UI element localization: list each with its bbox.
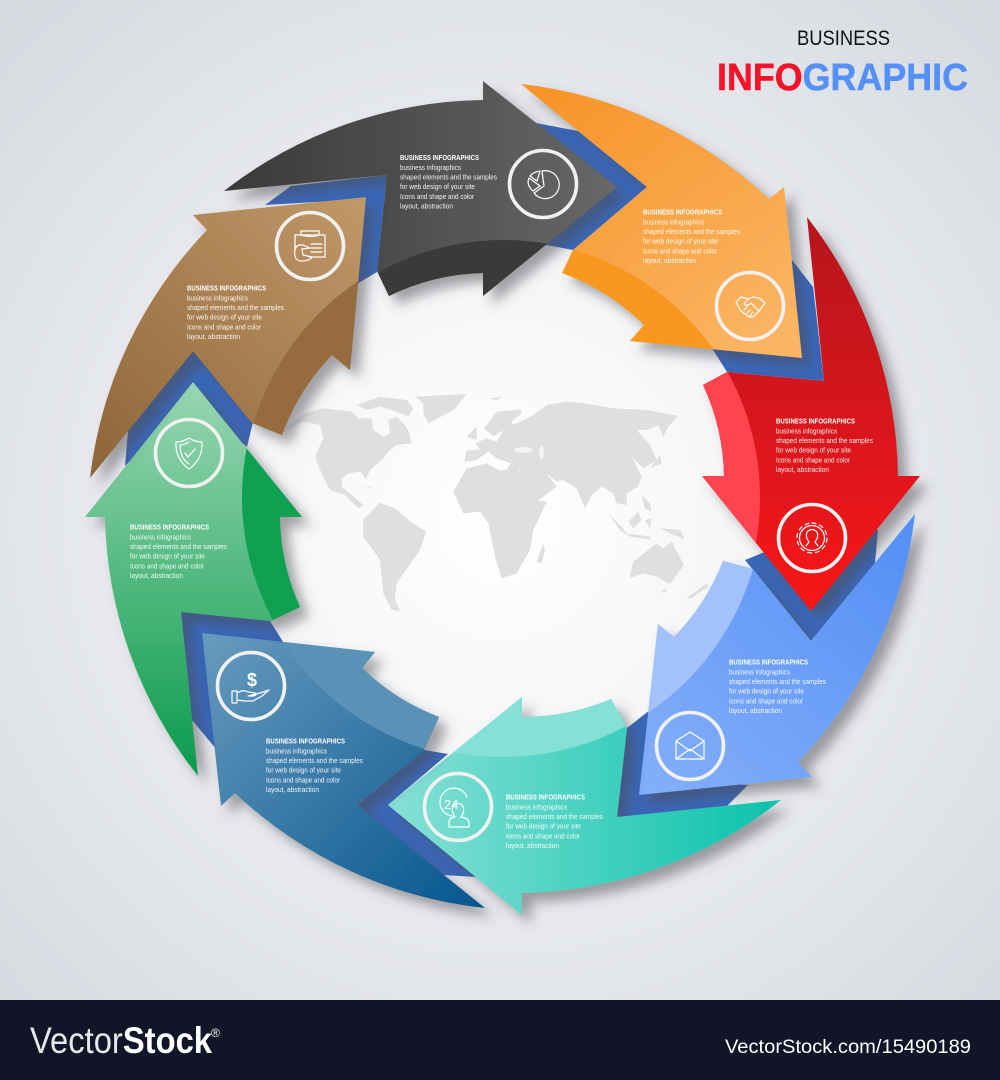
text: black panel: layout, abstraction <box>400 202 453 210</box>
icon: gear with person <box>778 504 846 572</box>
text: black panel: BUSINESS INFOGRAPHICS <box>400 153 479 162</box>
text: teal panel: for web design of your site <box>506 822 581 830</box>
text: brown panel: shaped elements and the samples <box>187 303 284 312</box>
text: brown panel: Icons and shape and color <box>187 322 261 332</box>
text: teal panel <box>506 792 603 850</box>
title: BUSINESS <box>797 27 890 50</box>
text: light blue panel: layout, abstraction <box>729 706 782 715</box>
footer url: VectorStock.com/15490189 <box>725 1037 971 1058</box>
panel: green arrow <box>85 382 314 784</box>
text: orange panel: business infographics <box>643 218 704 226</box>
text: brown panel: for web design of your site <box>187 312 262 322</box>
text: orange panel: shaped elements and the samples <box>643 227 740 236</box>
panel: teal arrow <box>388 697 790 926</box>
panel: light blue arrow <box>639 514 929 809</box>
text: red panel <box>776 416 873 474</box>
text: light blue panel: Icons and shape and color <box>729 696 803 706</box>
text: brown panel <box>187 284 284 341</box>
text: light blue panel: BUSINESS INFOGRAPHICS <box>729 658 808 666</box>
text: brown panel: business infographics <box>187 294 248 302</box>
icon: handshake <box>716 272 784 340</box>
text: dark blue panel: BUSINESS INFOGRAPHICS <box>266 736 345 746</box>
text: green panel: shaped elements and the samples <box>130 542 227 551</box>
text: red panel: BUSINESS INFOGRAPHICS <box>776 416 855 426</box>
text: dark blue panel: shaped elements and the samples <box>266 756 363 765</box>
title: INFOGRAPHIC <box>717 57 968 99</box>
text: green panel <box>130 522 227 580</box>
footer logo: VectorStock <box>30 1020 212 1061</box>
text: brown panel: BUSINESS INFOGRAPHICS <box>187 284 266 292</box>
arrow: brown <box>90 197 366 478</box>
panel: orange arrow <box>521 84 816 372</box>
icon: 24 hour support <box>424 774 492 840</box>
text: orange panel: for web design of your site <box>643 236 718 246</box>
text: red panel: for web design of your site <box>776 446 851 454</box>
footer bar <box>0 1000 1000 1080</box>
text: brown panel: layout, abstraction <box>187 332 240 341</box>
text: orange panel: BUSINESS INFOGRAPHICS <box>643 208 722 216</box>
text: green panel: Icons and shape and color <box>130 562 204 570</box>
icon: envelope <box>656 712 724 780</box>
panel: brown arrow <box>90 197 380 486</box>
arrow: red <box>702 217 920 611</box>
connector: blue folds behind arrow heads <box>125 120 878 877</box>
text: dark blue panel: for web design of your site <box>266 766 341 774</box>
text: green panel: BUSINESS INFOGRAPHICS <box>130 522 209 532</box>
text: red panel: business infographics <box>776 426 837 436</box>
text: light blue panel: for web design of your site <box>729 686 804 696</box>
text: dark blue panel: Icons and shape and color <box>266 776 340 784</box>
text: dark blue panel <box>266 736 363 794</box>
arrow: black <box>224 81 617 296</box>
text: teal panel: business infographics <box>506 802 567 812</box>
icon: dollar in hand <box>218 652 284 720</box>
text: teal panel: BUSINESS INFOGRAPHICS <box>506 792 585 802</box>
text: orange panel <box>643 208 740 265</box>
icon: dollar in hand: $ <box>247 670 257 690</box>
text: black panel: for web design of your site <box>400 182 475 191</box>
text: teal panel: shaped elements and the samples <box>506 812 603 821</box>
text: light blue panel: shaped elements and the samples <box>729 677 826 686</box>
text: red panel: shaped elements and the samples <box>776 436 873 445</box>
text: green panel: business infographics <box>130 532 191 542</box>
panel: dark blue arrow <box>202 633 494 922</box>
text: teal panel: layout, abstraction <box>506 841 559 850</box>
text: dark blue panel: layout, abstraction <box>266 785 319 794</box>
text: green panel: for web design of your site <box>130 552 205 560</box>
icon: clipboard with hand <box>276 212 344 280</box>
world map <box>287 394 708 611</box>
arrow: green <box>85 382 302 776</box>
footer trademark: ® <box>211 1026 220 1040</box>
title <box>717 27 968 99</box>
text: light blue panel: business infographics <box>729 668 790 676</box>
text: black panel: Icons and shape and color <box>400 192 474 201</box>
text: black panel: shaped elements and the samples <box>400 172 497 182</box>
text: orange panel: Icons and shape and color <box>643 246 717 256</box>
text: black panel: business infographics <box>400 163 461 172</box>
arrow: orange <box>521 84 802 358</box>
panel: black arrow <box>224 81 628 310</box>
text: red panel: layout, abstraction <box>776 465 829 474</box>
text: light blue panel <box>729 658 826 715</box>
arrow: teal <box>388 697 781 915</box>
text: red panel: Icons and shape and color <box>776 456 850 464</box>
text: teal panel: Icons and shape and color <box>506 832 580 840</box>
text: orange panel: layout, abstraction <box>643 256 696 265</box>
icon: pie chart <box>510 150 576 218</box>
text: black panel <box>400 153 497 210</box>
arrow: dark blue <box>202 633 485 908</box>
text: green panel: layout, abstraction <box>130 571 183 580</box>
arrow: light blue <box>639 514 915 795</box>
icon: shield with check <box>156 420 222 486</box>
panel: red arrow <box>702 217 931 622</box>
icon: 24 hour support: 24 <box>444 797 458 812</box>
text: dark blue panel: business infographics <box>266 746 327 756</box>
